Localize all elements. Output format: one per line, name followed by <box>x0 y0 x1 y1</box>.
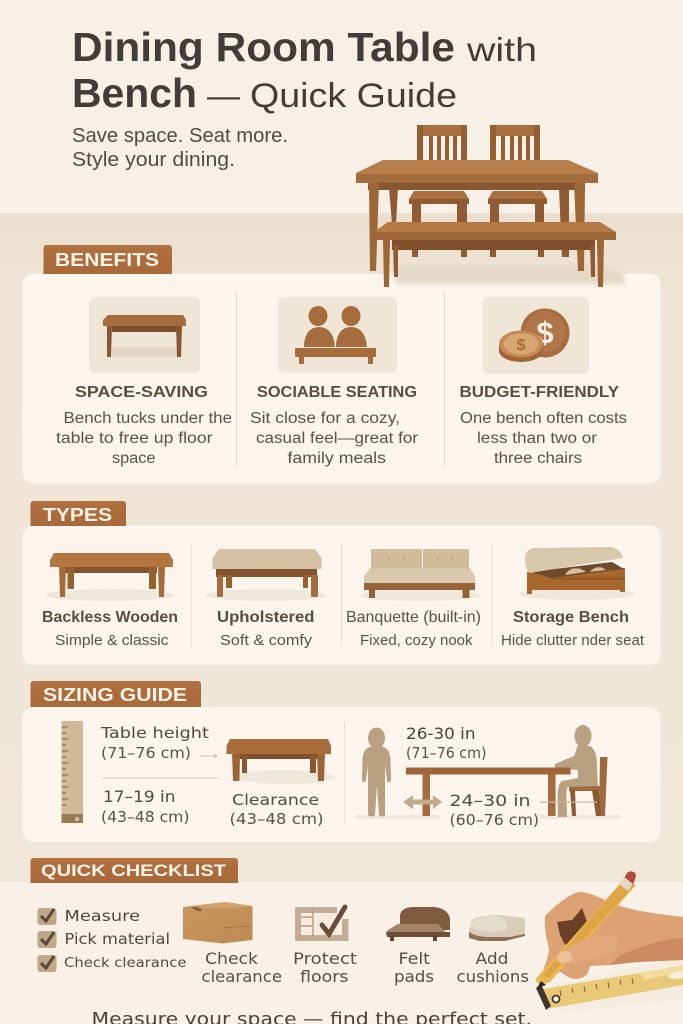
benefit: sociable seating text: casual feel—great for <box>256 430 418 447</box>
checklist items <box>38 907 186 972</box>
back legs <box>389 188 569 257</box>
title: Quick Guide <box>250 77 457 115</box>
clearance depth text <box>450 791 539 829</box>
clearance text: Clearance <box>232 791 319 809</box>
clearance text: (43–48 cm) <box>230 810 324 828</box>
panel: sizing guide <box>22 681 660 842</box>
checklist labels: Add <box>476 949 508 968</box>
title: Dining Room Table <box>72 24 455 70</box>
benefit: space-saving text: Bench tucks under the <box>64 410 232 427</box>
illustration: hand with pencil and ruler <box>535 871 683 1012</box>
icon: two people on bench <box>278 297 397 373</box>
benefit: sociable seating text: SOCIABLE SEATING <box>257 384 417 401</box>
height text <box>406 724 486 762</box>
floor shadows <box>356 815 620 819</box>
benefit: budget-friendly text: One bench often costs <box>460 410 627 427</box>
arrow: clearance double arrow <box>403 795 442 809</box>
bench height text <box>101 787 190 826</box>
title: with <box>466 31 537 68</box>
chair left back <box>417 125 467 165</box>
icon: backless wooden bench <box>45 553 175 601</box>
benefit: sociable seating text: family meals <box>288 450 386 467</box>
checklist labels: cushions <box>456 967 529 986</box>
subtitle <box>72 125 288 171</box>
sizing tab heading <box>30 681 201 707</box>
type labels: Banquette (built-in) <box>346 609 481 626</box>
type labels: Soft & comfy <box>220 633 313 649</box>
table height text <box>100 724 209 762</box>
benefit: budget-friendly text <box>460 384 627 467</box>
title: — <box>207 77 240 114</box>
icon: sofa felt pads <box>386 907 450 941</box>
checklist labels: clearance <box>202 967 282 986</box>
benefit: budget-friendly text: less than two or <box>477 430 597 447</box>
benefit: space-saving text <box>56 384 232 467</box>
icon: coins <box>482 297 589 374</box>
type labels: Hide clutter nder seat <box>501 633 644 649</box>
checklist labels: pads <box>394 967 434 986</box>
checklist labels: Check <box>205 949 259 968</box>
bench <box>374 222 616 287</box>
background wall <box>0 0 683 214</box>
subtitle: Save space. Seat more. <box>72 125 288 147</box>
icon: table <box>89 297 200 373</box>
bench height text: 17–19 in <box>103 787 176 806</box>
table height text: Table height <box>100 724 209 742</box>
hero illustration: dining table with chairs and bench <box>356 125 626 287</box>
checklist items: Check clearance <box>64 955 186 971</box>
bench height text: (43–48 cm) <box>101 808 190 826</box>
benefit: space-saving text: SPACE-SAVING <box>75 384 208 401</box>
icon: upholstered bench <box>206 549 326 601</box>
icon: cushions <box>469 915 525 941</box>
arrow: small pointer <box>200 754 217 758</box>
icon: vertical ruler <box>62 721 83 823</box>
height text: 26-30 in <box>406 724 476 743</box>
icon: coins: $ <box>536 315 554 350</box>
table <box>356 160 598 271</box>
icon: protect floors checkmark <box>295 907 348 941</box>
height text: (71–76 cm) <box>406 744 486 762</box>
background wood floor <box>0 213 683 883</box>
chair right back <box>490 125 540 165</box>
table height text: (71–76 cm) <box>101 744 191 762</box>
type labels: Upholstered <box>217 609 314 626</box>
benefit: space-saving text: table to free up floor <box>56 430 212 447</box>
type labels: Simple & classic <box>55 633 168 649</box>
checklist labels <box>202 949 529 986</box>
type labels: Fixed, cozy nook <box>360 633 473 649</box>
bottom paper area <box>0 882 683 1024</box>
clearance depth text: (60–76 cm) <box>450 811 539 829</box>
checklist items: Measure <box>64 907 140 925</box>
clearance depth text: 24–30 in <box>450 791 530 810</box>
benefits tab heading: BENEFITS <box>55 250 159 270</box>
panel: quick checklist heading: QUICK CHECKLIST <box>41 861 227 880</box>
panel: benefits <box>22 245 660 484</box>
checklist items: Pick material <box>64 930 170 948</box>
benefit: budget-friendly text: three chairs <box>494 450 582 467</box>
benefit: sociable seating text: Sit close for a cozy, <box>250 410 400 427</box>
benefit: space-saving text: space <box>112 450 156 467</box>
icon: standing person <box>362 728 391 816</box>
types tab heading: TYPES <box>43 505 112 525</box>
type labels: Backless Wooden <box>42 609 178 626</box>
benefit: budget-friendly text: BUDGET-FRIENDLY <box>460 384 619 401</box>
subtitle: Style your dining. <box>72 149 235 171</box>
benefits tab heading <box>44 245 172 274</box>
title: Bench <box>72 70 197 116</box>
type labels: Storage Bench <box>513 609 629 626</box>
checklist labels: Protect <box>293 949 357 968</box>
title <box>72 24 537 116</box>
icon: table side view <box>406 768 570 816</box>
icon: coins: $ <box>517 337 526 354</box>
icon: banquette <box>360 549 480 601</box>
type labels <box>42 609 644 649</box>
icon: bench side <box>226 739 335 784</box>
icon: seated person and chair <box>555 725 608 817</box>
types tab heading <box>30 501 126 526</box>
benefit: sociable seating text <box>250 384 418 467</box>
checklist labels: floors <box>300 967 348 986</box>
icon: cardboard box <box>183 902 252 944</box>
clearance text <box>230 791 324 828</box>
sizing tab heading: SIZING GUIDE <box>43 685 187 705</box>
panel: quick checklist heading <box>30 858 238 883</box>
icon: storage bench <box>519 547 635 600</box>
chair seats <box>409 191 547 204</box>
checklist labels: Felt <box>398 949 430 968</box>
panel: types <box>22 501 660 665</box>
